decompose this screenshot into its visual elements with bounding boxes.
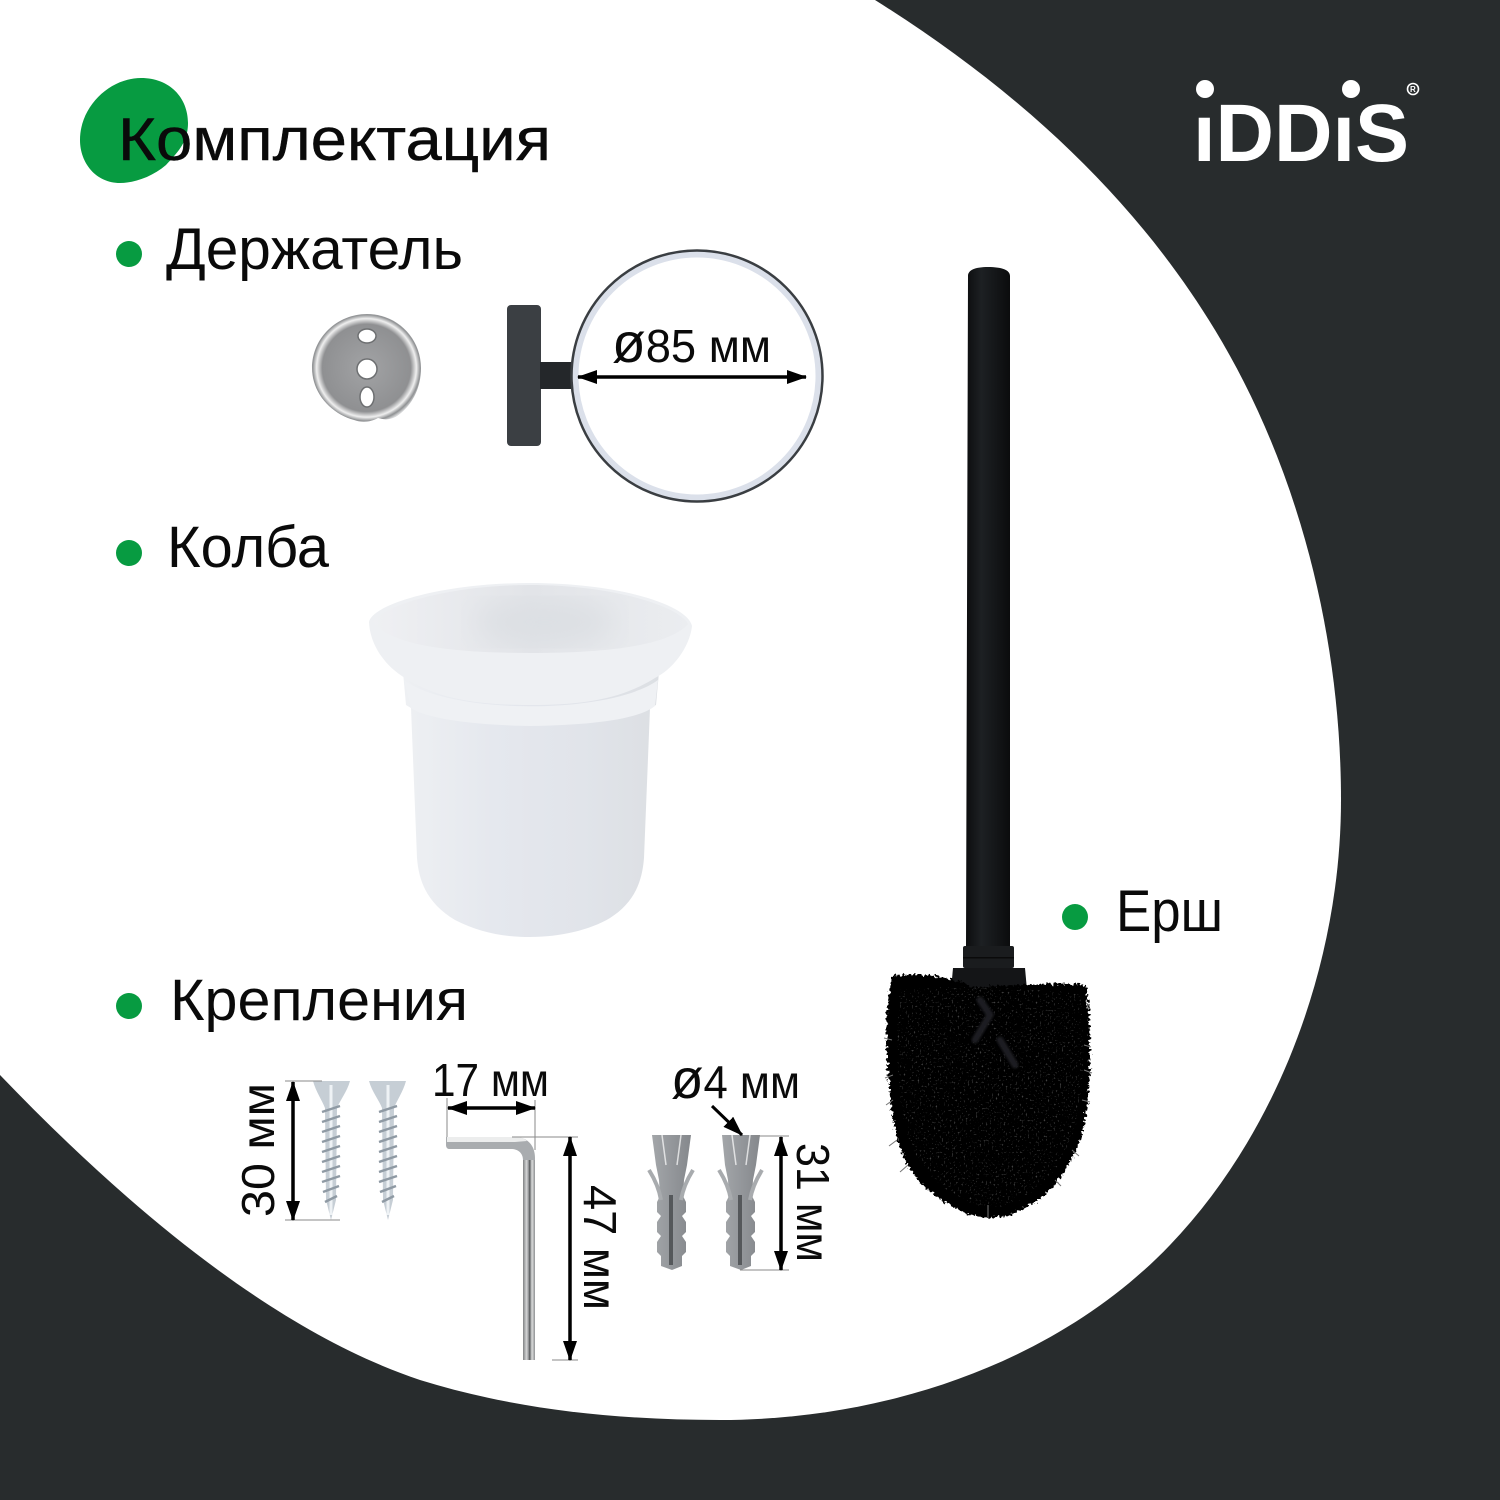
stem [540, 362, 574, 389]
bullet [116, 241, 142, 267]
green blob [80, 78, 188, 183]
heading with green blob [80, 78, 551, 183]
dimension: 85 mm: ø85 мм [612, 311, 771, 374]
bullet [1062, 904, 1088, 930]
dimension: 17 mm: 17 мм [432, 1054, 549, 1106]
arrow: 47 mm [568, 1137, 572, 1360]
label: holder: Держатель [166, 217, 463, 282]
holder ring [507, 250, 822, 502]
collar [963, 946, 1014, 968]
plug 1 [649, 1135, 693, 1270]
bullet [116, 540, 142, 566]
section: fasteners [116, 968, 468, 1033]
logo: iDDiS: R [1410, 85, 1416, 94]
title: Комплектация [118, 106, 551, 173]
logo: iDDiS: ıDDıS [1193, 88, 1409, 179]
label: fasteners: Крепления [170, 968, 468, 1033]
bristle tips [884, 1038, 1092, 1218]
toilet brush [884, 267, 1092, 1218]
label: brush: Ерш [1116, 879, 1223, 944]
extension lines [285, 1081, 340, 1220]
dimension: 30 mm: 30 мм [232, 1083, 284, 1217]
arrow: 31 mm [779, 1137, 783, 1270]
extension lines [740, 1136, 789, 1270]
section: brush [1062, 879, 1223, 944]
glass flask [369, 583, 692, 937]
dimension arrow [578, 375, 806, 379]
bristle core [975, 1000, 1015, 1065]
label: flask: Колба [167, 515, 330, 580]
bullet [116, 993, 142, 1019]
rim [369, 583, 692, 705]
hex key [432, 1054, 626, 1360]
body [403, 672, 659, 937]
dimension: 31 mm: 31 мм [787, 1143, 839, 1262]
arrow: 17 mm [448, 1106, 535, 1110]
bristles [886, 974, 1090, 1218]
extension lines [447, 1098, 578, 1360]
screw 1 [313, 1081, 350, 1220]
handle [966, 267, 1010, 948]
dimension: 4 mm: ø4 мм [671, 1047, 800, 1110]
dimension: 47 mm: 47 мм [574, 1185, 626, 1310]
ring [575, 254, 819, 498]
cap [951, 968, 1027, 990]
arrow: 30 mm [291, 1082, 295, 1220]
pointer arrow: 4 mm [712, 1106, 742, 1135]
plug 2 [719, 1135, 762, 1270]
screws [232, 1081, 406, 1220]
section: flask [116, 515, 330, 580]
wall plugs [649, 1047, 839, 1270]
screw 2 [369, 1081, 406, 1220]
bristle specks [897, 987, 1083, 1208]
section: holder [116, 217, 463, 282]
mounting plate [312, 314, 421, 422]
wall plate [507, 305, 541, 446]
band [404, 680, 658, 726]
inner bowl [373, 585, 688, 653]
